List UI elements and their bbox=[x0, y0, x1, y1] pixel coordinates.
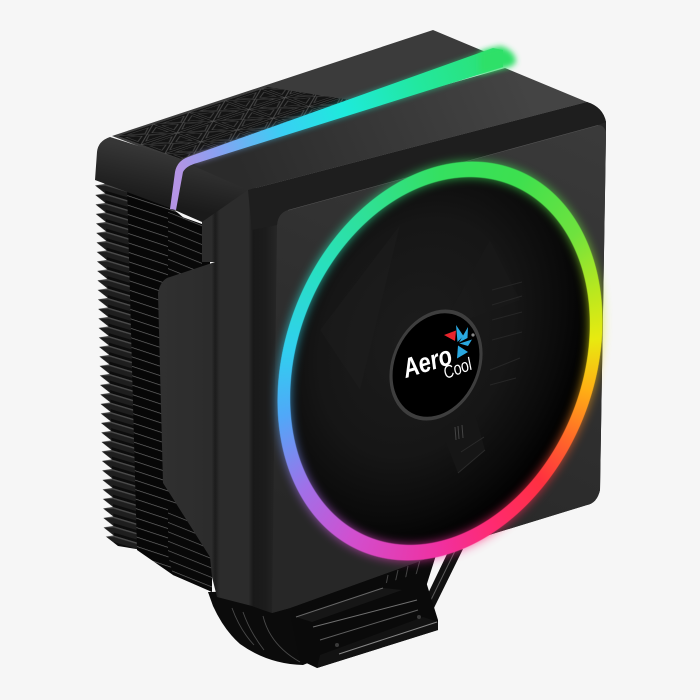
heat pipes bbox=[208, 549, 463, 665]
logo wordmark Aero: Aero bbox=[398, 340, 456, 384]
dark top band bbox=[248, 102, 606, 230]
left fin stack bbox=[90, 178, 142, 550]
fan interior bbox=[289, 143, 591, 579]
front shoulder bbox=[180, 68, 587, 190]
strip end glow bbox=[480, 46, 516, 74]
RGB fan ring bbox=[277, 161, 603, 561]
panel top highlight bbox=[288, 125, 598, 210]
logo wordmark Cool: Cool bbox=[441, 354, 475, 383]
middle fin stack bbox=[127, 186, 212, 592]
base plate bbox=[290, 572, 438, 668]
left shoulder block bbox=[95, 137, 260, 262]
top face bbox=[112, 30, 500, 162]
ring glow bbox=[270, 154, 610, 568]
icon: logo pinwheel bbox=[444, 325, 475, 358]
top vent mesh bbox=[117, 87, 350, 159]
strip side glow bbox=[188, 48, 502, 163]
front panel bbox=[272, 125, 606, 613]
RGB top strip bbox=[170, 48, 503, 210]
body side and front frame bbox=[158, 102, 606, 613]
